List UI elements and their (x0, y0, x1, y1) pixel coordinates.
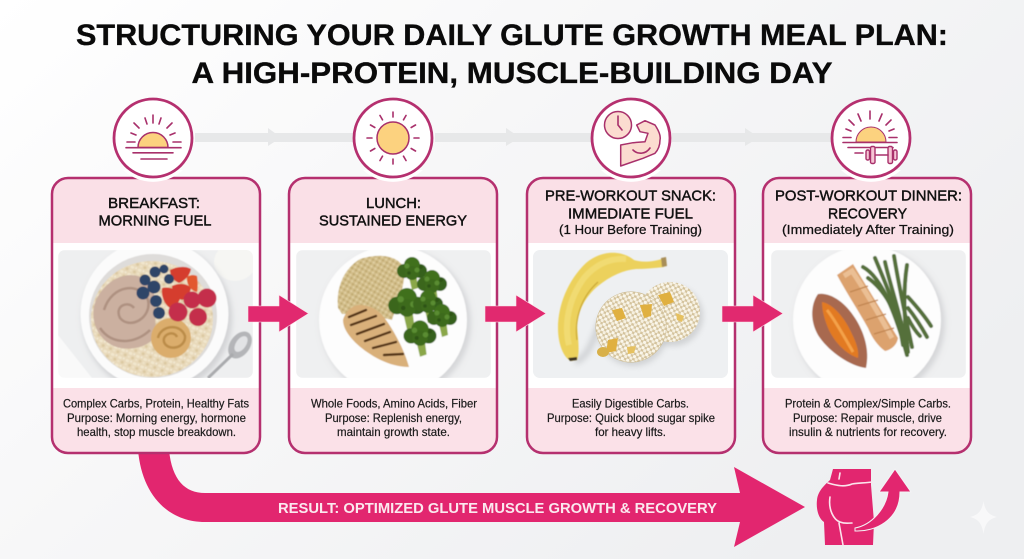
icon: sunset and dumbbell (832, 99, 910, 182)
lunch description: maintain growth state. (337, 425, 450, 439)
dinner heading: RECOVERY (828, 206, 907, 222)
dinner heading: POST-WORKOUT DINNER: (775, 188, 962, 204)
icon: sun (354, 99, 432, 182)
title (76, 19, 948, 90)
icon: glutes with growth arrow (817, 469, 911, 545)
lunch description: Purpose: Replenish energy, (325, 411, 462, 425)
breakfast description (63, 396, 249, 439)
timeline connector (195, 128, 832, 146)
panel: post-workout dinner (763, 178, 971, 453)
breakfast description: health, stop muscle breakdown. (77, 425, 236, 439)
lunch description (311, 396, 477, 439)
lunch heading (319, 195, 467, 230)
result label: RESULT: OPTIMIZED GLUTE MUSCLE GROWTH & RECOVERY (278, 501, 717, 517)
arrow: breakfast to lunch (248, 295, 308, 332)
breakfast description: Complex Carbs, Protein, Healthy Fats (63, 396, 249, 410)
snack description: for heavy lifts. (595, 425, 666, 439)
breakfast heading: MORNING FUEL (98, 212, 212, 230)
snack description: Purpose: Quick blood sugar spike (547, 411, 715, 425)
dinner description: insulin & nutrients for recovery. (789, 425, 947, 439)
arrow: lunch to snack (485, 295, 546, 332)
panel: lunch (289, 178, 497, 453)
title: A HIGH-PROTEIN, MUSCLE-BUILDING DAY (192, 57, 832, 90)
photo: chicken, quinoa and broccoli plate (296, 250, 491, 378)
snack heading: IMMEDIATE FUEL (568, 206, 693, 222)
dinner description: Protein & Complex/Simple Carbs. (785, 396, 951, 410)
breakfast heading: BREAKFAST: (108, 195, 200, 212)
breakfast description: Purpose: Morning energy, hormone (67, 411, 246, 425)
panel: pre-workout snack (527, 178, 735, 453)
icon: clock and flexed arm (592, 99, 670, 182)
snack heading: PRE-WORKOUT SNACK: (545, 188, 716, 204)
snack heading (545, 188, 716, 237)
title: STRUCTURING YOUR DAILY GLUTE GROWTH MEAL PLAN: (76, 19, 948, 52)
result arrow (138, 450, 805, 547)
lunch description: Whole Foods, Amino Acids, Fiber (311, 396, 477, 410)
icon: sunrise (114, 99, 192, 182)
breakfast heading (98, 195, 212, 230)
dinner description: Purpose: Repair muscle, drive (793, 411, 942, 425)
arrow: snack to dinner (722, 295, 783, 332)
lunch heading: SUSTAINED ENERGY (319, 212, 467, 230)
panel: breakfast (52, 178, 260, 453)
snack heading: (1 Hour Before Training) (559, 222, 702, 237)
lunch heading: LUNCH: (366, 195, 421, 212)
snack description (547, 396, 715, 439)
photo: oatmeal bowl (58, 250, 253, 378)
photo: salmon, sweet potato and asparagus plate (771, 250, 966, 378)
photo: banana and rice cakes (533, 250, 728, 378)
dinner description (785, 396, 951, 439)
dinner heading (775, 188, 962, 237)
snack description: Easily Digestible Carbs. (572, 396, 689, 410)
decorative sparkle (970, 501, 997, 534)
dinner heading: (Immediately After Training) (782, 222, 954, 237)
